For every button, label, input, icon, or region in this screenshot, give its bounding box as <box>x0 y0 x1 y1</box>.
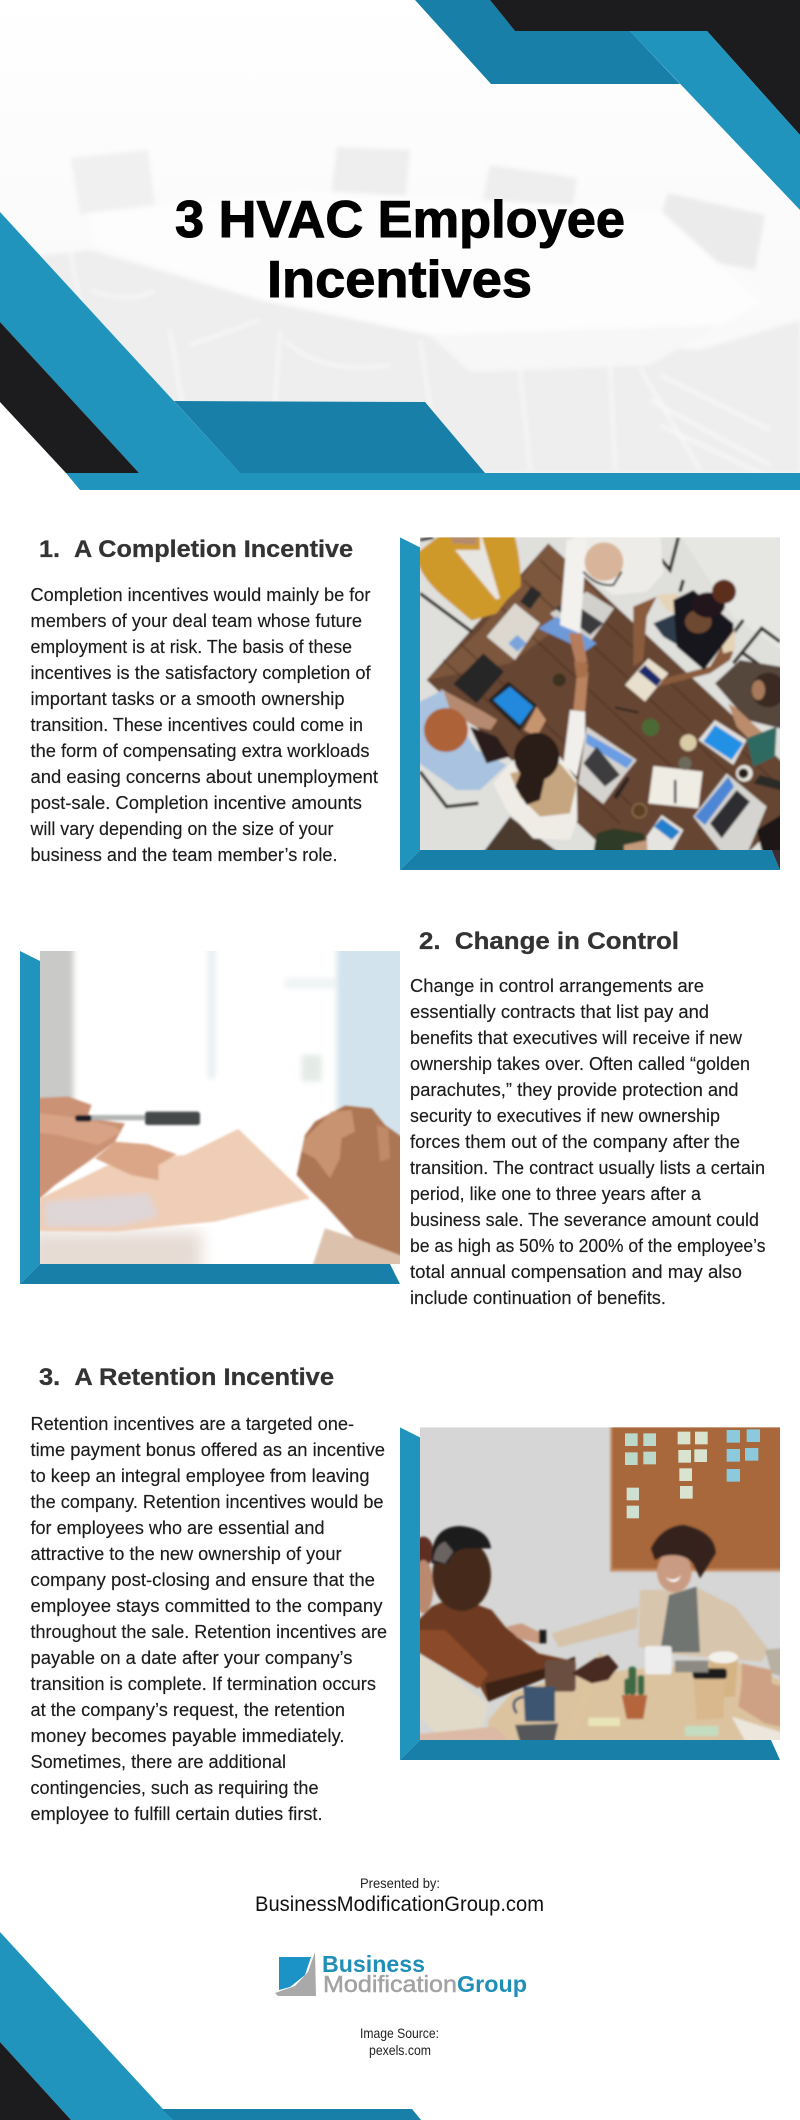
cactus <box>622 1695 647 1719</box>
body text 3: Sometimes, there are additional <box>30 1752 286 1772</box>
body text 3: employee to fulfill certain duties first. <box>30 1804 322 1824</box>
right clasped hands <box>295 1104 400 1256</box>
body text 2: ownership takes over. Often called “golden <box>410 1054 750 1074</box>
body text 3: throughout the sale. Retention incentives are <box>30 1622 387 1642</box>
man in blue shirt <box>440 688 497 730</box>
body text 2: be as high as 50% to 200% of the employee’s <box>410 1236 766 1256</box>
body text 3: Retention incentives are a targeted one- <box>30 1414 354 1434</box>
cream sleeve person <box>420 1652 488 1732</box>
left woman edge <box>420 1535 434 1565</box>
body text 2 <box>410 976 766 1308</box>
bottom light blue strip <box>66 473 800 490</box>
frame bottom strip <box>400 1740 780 1760</box>
body text 3: time payment bonus offered as an incentive <box>30 1440 385 1460</box>
body text 1: will vary depending on the size of your <box>30 819 333 839</box>
body text 2: security to executives if new ownership <box>410 1106 720 1126</box>
logo: Business Modification Group: Business <box>322 1951 425 1977</box>
silver laptop and blue paper <box>550 592 614 640</box>
body text 1: transition. These incentives could come in <box>30 715 363 735</box>
photo 3: colleagues at a meeting with frame <box>400 1413 799 1760</box>
left hand <box>28 1097 125 1198</box>
top-right light blue band <box>630 31 800 210</box>
heading 1: 1. A Completion Incentive <box>39 536 353 563</box>
body text 2: period, like one to three years after a <box>410 1184 702 1204</box>
title <box>175 191 625 309</box>
paper <box>28 1129 310 1232</box>
fingers on paper <box>95 1142 177 1180</box>
wood table <box>427 543 800 863</box>
logo: Business Modification Group <box>275 1951 527 1997</box>
frame left strip <box>20 951 40 1284</box>
sticky notes on table <box>588 1718 620 1726</box>
body text 3: attractive to the new ownership of your <box>30 1544 342 1564</box>
body text 1 <box>30 585 378 865</box>
header banner <box>0 0 800 490</box>
title: Incentives <box>267 251 532 309</box>
footer black block <box>0 2042 71 2120</box>
bottom right laptop <box>693 773 767 863</box>
body text 2: essentially contracts that list pay and <box>410 1002 709 1022</box>
woman head <box>657 1551 692 1592</box>
bottom-left light blue band <box>0 212 240 473</box>
website address: BusinessModificationGroup.com <box>255 1893 544 1916</box>
bottom-left black block <box>0 322 139 473</box>
frame bottom strip <box>20 1264 400 1284</box>
faded meeting-room photo <box>40 146 800 473</box>
frame bottom strip <box>400 850 780 870</box>
image source site: pexels.com <box>369 2042 431 2058</box>
woman blazer <box>638 1588 769 1662</box>
man in yellow jacket <box>417 530 521 621</box>
top-right black block <box>490 0 800 135</box>
footer light blue band <box>0 1932 173 2120</box>
section 1: a completion incentive <box>30 530 800 877</box>
top-right dark blue band <box>415 0 680 84</box>
man head <box>432 1539 491 1611</box>
photo 1: team around table with frame <box>400 530 800 877</box>
body text 3: contingencies, such as requiring the <box>30 1778 318 1798</box>
bald man <box>573 538 664 594</box>
blue tablet <box>488 682 537 731</box>
body text 2: parachutes,” they provide protection and <box>410 1080 738 1100</box>
body text 1: and easing concerns about unemployment <box>30 767 378 787</box>
presented by label: Presented by: <box>360 1875 440 1891</box>
logo: Business Modification Group: Modification <box>323 1971 457 1997</box>
section 3: a retention incentive <box>30 1364 799 1824</box>
person in brown sweater <box>714 658 780 730</box>
table <box>40 1226 208 1264</box>
body text 3: company post-closing and ensure that the <box>30 1570 375 1590</box>
woman on the right <box>633 597 657 667</box>
body text 1: important tasks or a smooth ownership <box>30 689 344 709</box>
footer dark blue band <box>162 2109 421 2120</box>
body text 2: include continuation of benefits. <box>410 1288 666 1308</box>
frame left strip <box>400 1427 420 1760</box>
body text 3: at the company’s request, the retention <box>30 1700 345 1720</box>
section 2: change in control <box>20 928 766 1308</box>
white corner under the left bands <box>0 402 80 490</box>
corkboard <box>608 1427 780 1573</box>
logo icon <box>275 1952 316 1996</box>
body text 2: transition. The contract usually lists a certain <box>410 1158 765 1178</box>
sticky notes <box>625 1429 760 1518</box>
body text 3: payable on a date after your company’s <box>30 1648 352 1668</box>
frame left strip <box>400 537 420 870</box>
body text 3: for employees who are essential and <box>30 1518 324 1538</box>
white laptop <box>487 603 540 660</box>
pen <box>90 1115 147 1120</box>
bottom dark blue band <box>174 401 485 473</box>
table items <box>680 734 697 751</box>
heading 3: 3. A Retention Incentive <box>39 1364 334 1391</box>
body text 2: total annual compensation and may also <box>410 1262 742 1282</box>
chairs <box>420 537 780 807</box>
body text 1: business and the team member’s role. <box>30 845 338 865</box>
body text 1: Completion incentives would mainly be for <box>30 585 370 605</box>
heading 2: 2. Change in Control <box>419 928 679 955</box>
bottom tablet and person <box>592 828 646 850</box>
photo 2: handing over a contract with frame <box>20 935 413 1284</box>
body text 3: employee stays committed to the company <box>30 1596 382 1616</box>
body text 2: Change in control arrangements are <box>410 976 704 996</box>
footer <box>0 1875 544 2120</box>
cups and laptop <box>545 1660 576 1692</box>
center laptop <box>578 727 637 804</box>
body text 3: to keep an integral employee from leaving <box>30 1466 370 1486</box>
right tablet <box>698 720 747 765</box>
title: 3 HVAC Employee <box>175 191 625 249</box>
body text 2: business sale. The severance amount could <box>410 1210 759 1230</box>
logo: Business Modification Group: Group <box>457 1971 527 1997</box>
man shirt <box>420 1600 568 1702</box>
body text 1: post-sale. Completion incentive amounts <box>30 793 362 813</box>
dark folder <box>453 653 504 703</box>
image source label: Image Source: <box>360 2025 439 2041</box>
notebook and phone <box>625 658 668 702</box>
body text 2: benefits that executives will receive if new <box>410 1028 743 1048</box>
body text 3: the company. Retention incentives would be <box>30 1492 384 1512</box>
body text 1: the form of compensating extra workloads <box>30 741 370 761</box>
body text 1: incentives is the satisfactory completion of <box>30 663 372 683</box>
woman with dark hair <box>493 757 577 840</box>
notebook <box>675 1661 708 1672</box>
body text 3: money becomes payable immediately. <box>30 1726 344 1746</box>
body text 3: transition is complete. If termination occurs <box>30 1674 376 1694</box>
body text 2: forces them out of the company after the <box>410 1132 740 1152</box>
body text 1: employment is at risk. The basis of these <box>30 637 352 657</box>
body text 1: members of your deal team whose future <box>30 611 362 631</box>
body text 3 <box>30 1414 387 1824</box>
table <box>488 1663 795 1753</box>
right-side hands <box>765 1647 795 1680</box>
